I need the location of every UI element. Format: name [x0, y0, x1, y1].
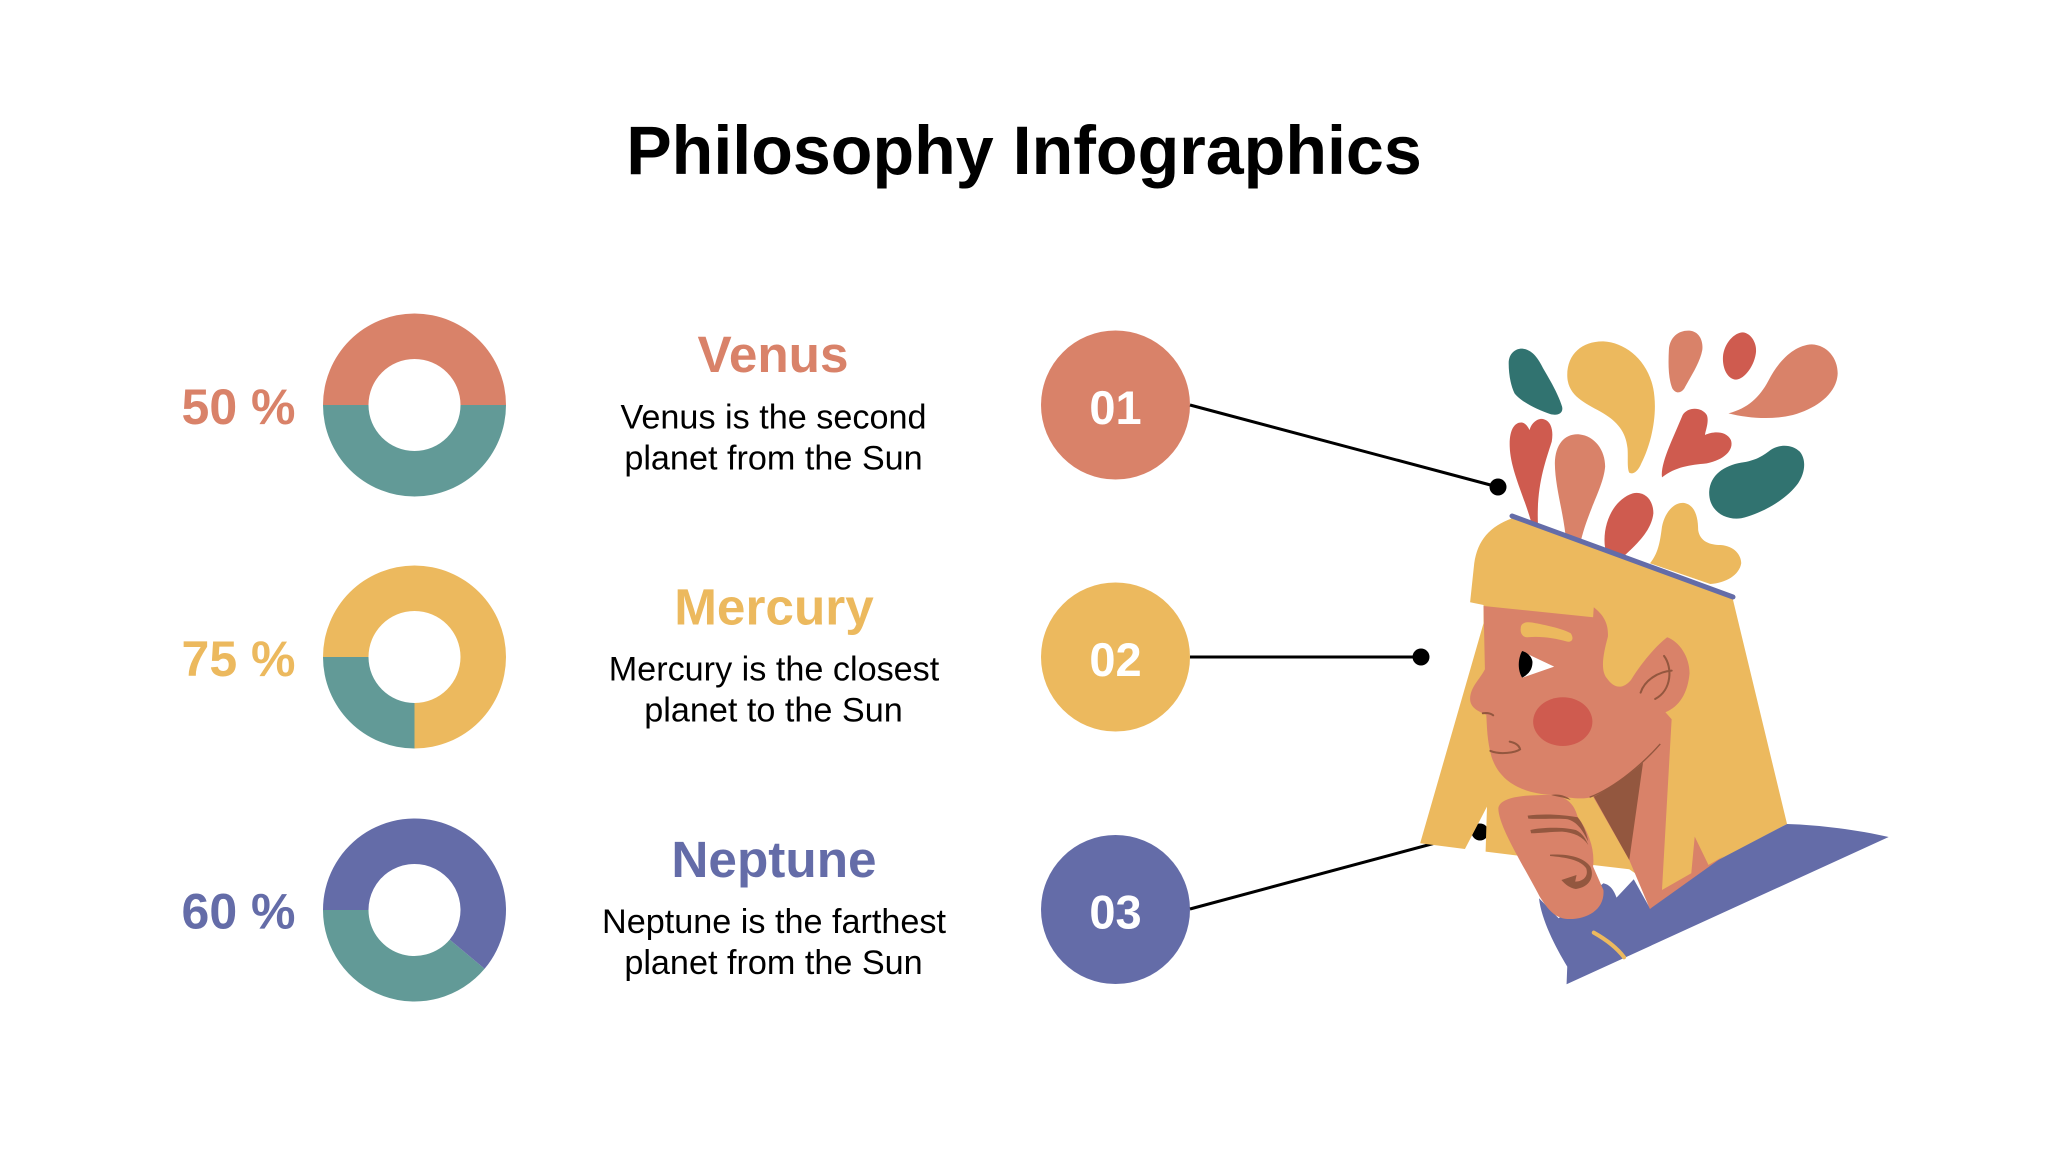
heading: Mercury: Mercury — [674, 578, 874, 636]
connector line 03 — [1190, 824, 1488, 909]
description: Neptune: planet from the Sun — [624, 944, 923, 982]
donut chart: 50 % — [323, 314, 506, 496]
connector line 02 — [1190, 648, 1430, 666]
donut chart: 75 % — [323, 565, 506, 748]
headband line — [1512, 516, 1733, 597]
heading: Neptune: Neptune — [671, 831, 877, 888]
number badge: 02 — [1041, 582, 1190, 732]
face and neck — [1470, 606, 1724, 909]
description: Mercury: Mercury is the closest — [609, 650, 940, 688]
description: Venus: Venus is the second — [620, 398, 927, 436]
body — [1539, 824, 1889, 984]
description: Venus: planet from the Sun — [624, 440, 923, 478]
cheek — [1533, 697, 1592, 746]
title: Philosophy Infographics — [626, 113, 1422, 189]
jaw line — [1590, 744, 1660, 797]
number badge: 03: 03 — [1089, 886, 1142, 938]
number badge: 03 — [1041, 835, 1190, 984]
row 1: Venus — [182, 314, 1190, 496]
eyebrow — [1521, 622, 1572, 642]
description: Neptune: Neptune is the farthest — [602, 903, 946, 941]
percentage: 75 %: 75 % — [182, 631, 296, 687]
illustration: thinking person — [1420, 331, 1889, 984]
hand — [1498, 795, 1604, 919]
row 2: Mercury — [182, 565, 1190, 748]
neck shadow — [1594, 763, 1643, 860]
percentage: 50 %: 50 % — [182, 379, 296, 435]
hair — [1420, 518, 1787, 892]
heading: Venus: Venus — [697, 326, 849, 383]
percentage: 60 %: 60 % — [182, 884, 296, 940]
ear lines — [1641, 656, 1672, 699]
connector line 01 — [1190, 405, 1506, 496]
number badge: 01: 01 — [1089, 381, 1142, 434]
thought shapes — [1509, 331, 1838, 584]
donut chart: 60 % — [323, 818, 506, 1001]
collar line — [1594, 933, 1624, 957]
row 3: Neptune — [182, 818, 1190, 1001]
nose line and mouth — [1483, 713, 1520, 753]
number badge: 01 — [1041, 330, 1190, 480]
description: Mercury: planet to the Sun — [644, 692, 903, 730]
eye — [1519, 651, 1554, 678]
number badge: 02: 02 — [1089, 633, 1142, 686]
finger lines — [1528, 794, 1592, 889]
